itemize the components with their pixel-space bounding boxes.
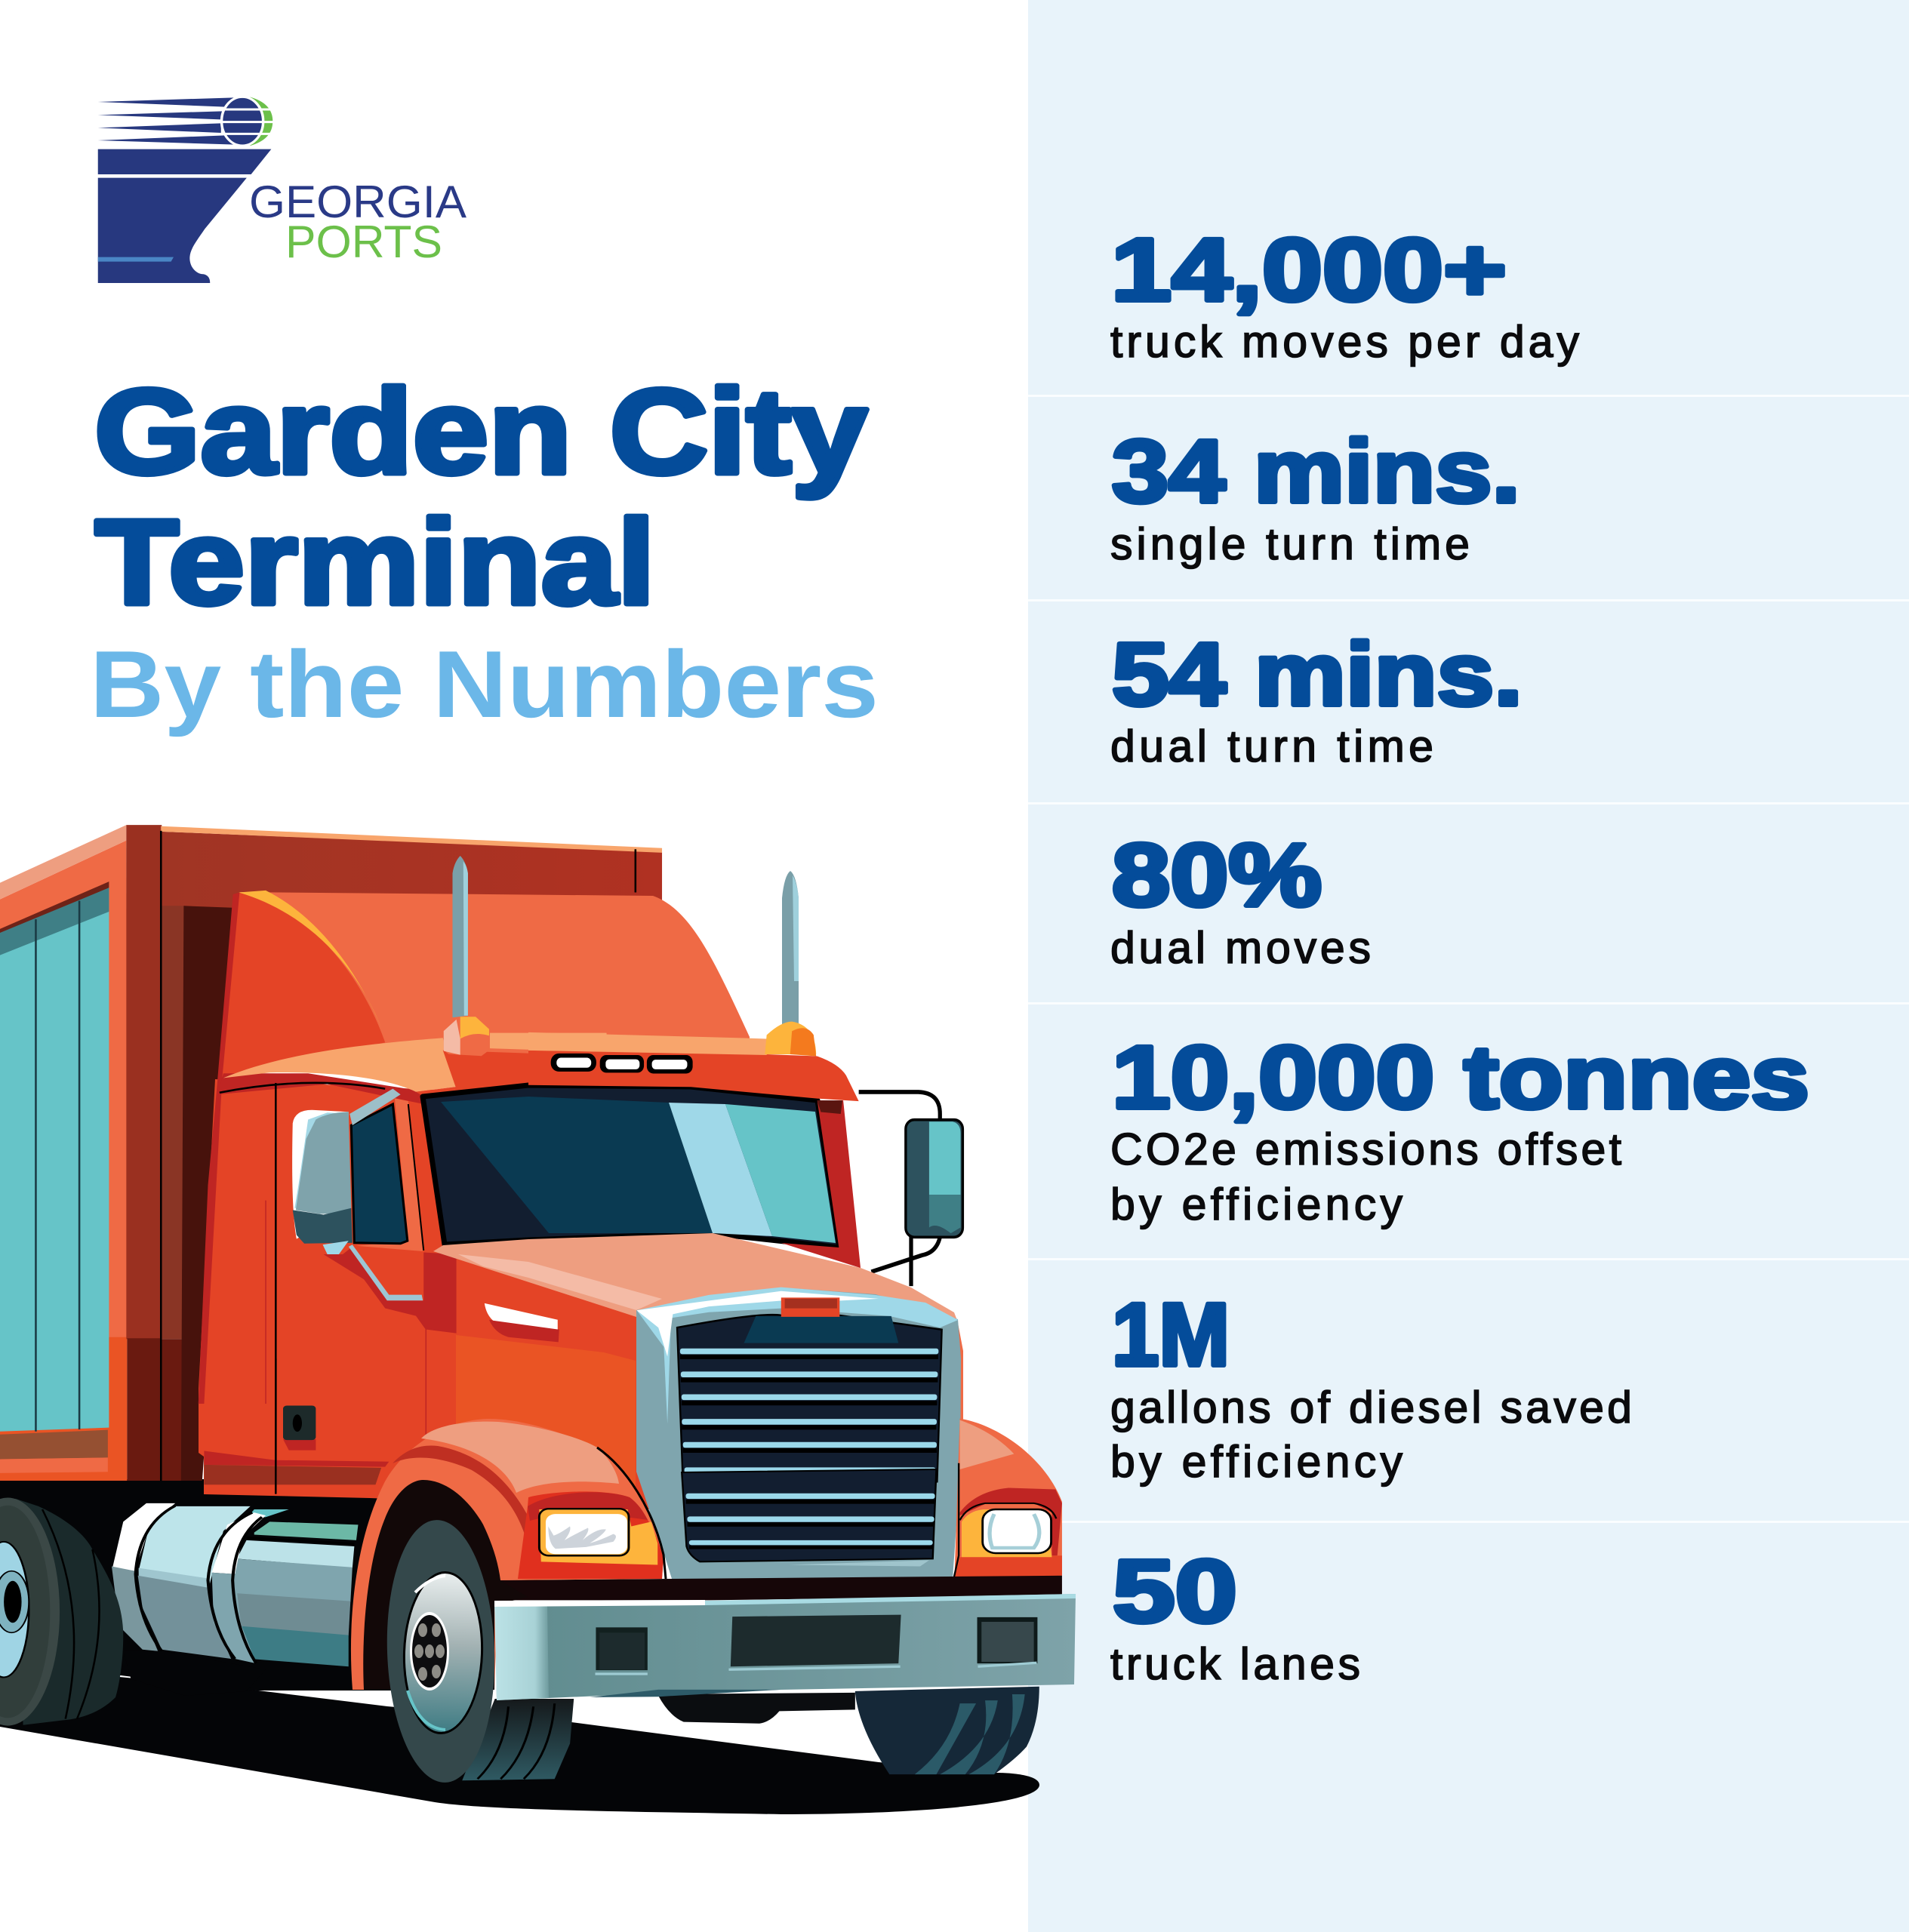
cab body (199, 1079, 649, 1509)
title (94, 364, 867, 629)
stat: emissions offset: 10,000 tonnes (1112, 1028, 1809, 1128)
left marker light (444, 1017, 489, 1056)
stat: emissions offset: CO2e emissions offset (1110, 1124, 1621, 1174)
stat: dual moves: 80% (1112, 826, 1322, 925)
fairing side (221, 892, 385, 1078)
A-pillar and clearance lights (528, 1022, 861, 1268)
grille surround (636, 1287, 963, 1579)
left side mirror (292, 1110, 349, 1239)
stat: dual turn time: 54 mins. (1112, 625, 1523, 724)
left exhaust stack (452, 856, 468, 1017)
left front fender (351, 1419, 666, 1690)
grille dark (677, 1315, 942, 1481)
stat: diesel saved: 1M (1112, 1285, 1230, 1385)
stat: dual moves (1110, 826, 1371, 973)
panel: statistics background (1028, 0, 1909, 1932)
cab roof fairing (240, 892, 750, 1057)
grille bars upper (680, 1355, 938, 1478)
tall right exhaust stack (782, 871, 799, 1026)
right front tire (855, 1687, 1039, 1774)
front wheel tread (462, 1699, 574, 1780)
chassis underside (0, 1479, 423, 1690)
top marker light (781, 1297, 839, 1317)
grille chrome highlight (636, 1287, 958, 1424)
illustration: orange semi truck (0, 825, 1076, 1814)
grille lower (682, 1469, 936, 1561)
stat: diesel saved: gallons of diesel saved (1110, 1383, 1632, 1432)
left headlight (539, 1509, 657, 1564)
front bumper (494, 1594, 1076, 1700)
logo: Georgia Ports (98, 97, 466, 283)
stat: single turn time (1110, 422, 1520, 569)
stat: truck lanes: 50 (1113, 1542, 1237, 1641)
stat: emissions offset (1110, 1028, 1809, 1229)
stat: dual turn time: dual turn time (1110, 721, 1433, 771)
stat: emissions offset: by efficiency (1110, 1180, 1402, 1229)
icon: ship hull and globe (98, 97, 274, 283)
fuel tank (0, 1358, 389, 1726)
title: Garden City (94, 364, 867, 499)
stat: truck lanes: truck lanes (1110, 1639, 1360, 1689)
stat: truck moves: 14,000+ (1111, 220, 1507, 320)
trailer (0, 825, 662, 1481)
door lines (220, 1083, 385, 1481)
stat: single turn time: 34 mins. (1112, 422, 1520, 521)
right fender (954, 1419, 1062, 1579)
bumper openings (596, 1627, 648, 1670)
mirror shadow on door (324, 1247, 457, 1334)
stat: truck lanes (1110, 1542, 1360, 1689)
subtitle: By the Numbers (90, 631, 879, 737)
cab lower step (204, 1451, 389, 1467)
roof visor (217, 1073, 423, 1104)
air dam (658, 1693, 855, 1724)
stat: diesel saved (1110, 1285, 1632, 1487)
title: Terminal (95, 494, 655, 629)
wheel well (363, 1480, 528, 1690)
stat: diesel saved: by efficiency (1110, 1437, 1402, 1487)
ground shadow (0, 1638, 1039, 1814)
hood side vent (489, 1320, 559, 1342)
black bumper gap (492, 1576, 1062, 1600)
windshield (423, 1085, 839, 1487)
right headlight (962, 1509, 1052, 1557)
side window (356, 1098, 423, 1251)
stat: single turn time: single turn time (1110, 519, 1470, 569)
hood (433, 1233, 958, 1322)
stat: dual turn time (1110, 625, 1523, 771)
stat: truck moves (1110, 220, 1579, 367)
logo: Georgia Ports: PORTS (285, 217, 442, 267)
door latch (283, 1439, 316, 1451)
front tire and rim (383, 1518, 499, 1784)
rear wheel (15, 1499, 123, 1725)
stat: truck moves: truck moves per day (1110, 317, 1579, 367)
right side mirror (859, 1092, 962, 1286)
logo wordmark: GEORGIA (249, 177, 466, 227)
stat: dual moves: dual moves (1110, 923, 1371, 973)
